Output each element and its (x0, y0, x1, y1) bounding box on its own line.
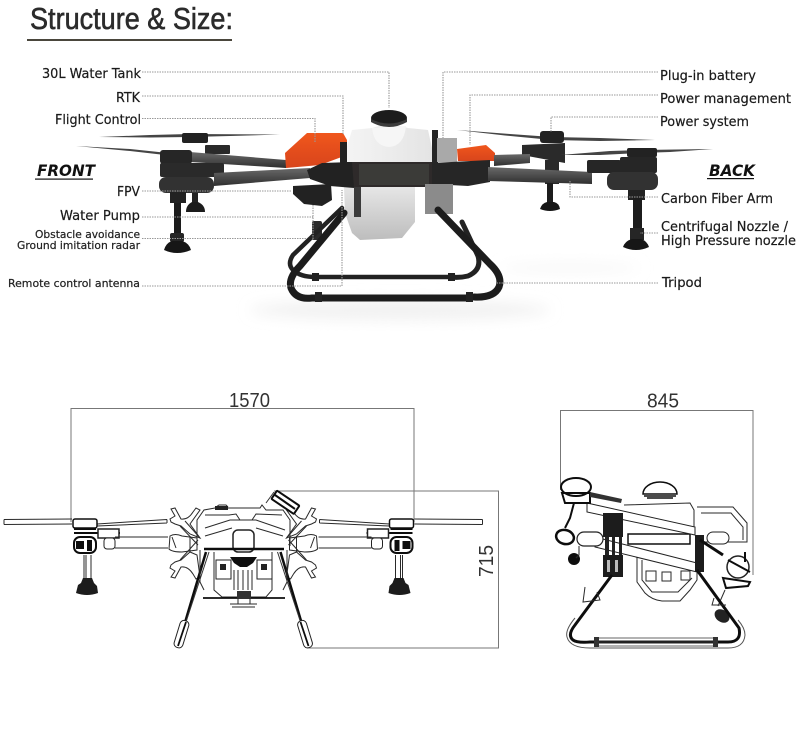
labels: front side: Ground imitation radar (17, 239, 140, 252)
upper arm (587, 503, 695, 535)
front motor (712, 552, 750, 626)
heading: BACK: BACK (709, 161, 757, 180)
lower arm (595, 537, 697, 572)
labels: front side: FPV (117, 185, 140, 200)
front right rotor (560, 148, 713, 250)
side view drawing (554, 390, 753, 648)
dimension: 845 (560, 390, 753, 575)
FPV camera (293, 184, 332, 206)
labels: back side: Power management (660, 92, 791, 107)
rear left rotor (99, 133, 280, 212)
front view drawing (4, 390, 498, 649)
dimension: 1570 (71, 390, 414, 522)
labels: back side: Power system (660, 115, 749, 130)
rear right rotor (457, 130, 655, 211)
tank (624, 482, 747, 601)
rear left arm (190, 152, 286, 168)
labels: back side: Tripod (661, 276, 702, 291)
left rotor and arm (4, 508, 209, 649)
labels: back side (660, 69, 796, 291)
labels: front side: Flight Control (55, 113, 141, 128)
rear right arm (494, 154, 530, 166)
left landing gear (290, 208, 470, 302)
front left rotor (76, 146, 224, 253)
dimension: 715: 715 (476, 545, 498, 577)
labels: front side: RTK (116, 91, 140, 106)
labels: back side: Plug-in battery (660, 69, 756, 84)
dimension: 1570: 1570 (229, 390, 270, 412)
centre tank (344, 110, 433, 240)
labels: front side: Obstacle avoidance (35, 228, 140, 241)
drone photo (76, 110, 713, 320)
centre hubs (307, 130, 490, 214)
labels: back side: Carbon Fiber Arm (661, 192, 773, 207)
labels: front side (8, 67, 141, 290)
dimension: 845: 845 (647, 390, 679, 412)
orange covers (285, 133, 495, 168)
leader lines (142, 72, 658, 286)
right rotor and arm (mirrored) (278, 508, 482, 649)
labels: front side: Remote control antenna (8, 277, 140, 290)
black frame posts (603, 513, 729, 577)
ground shadow (250, 263, 640, 320)
water pump (312, 221, 322, 240)
heading: FRONT: FRONT (37, 161, 96, 180)
labels: back side: Centrifugal Nozzle / (661, 220, 789, 235)
labels: back side: High Pressure nozzle (661, 234, 796, 249)
title: Structure & Size: (30, 1, 233, 36)
tripod (567, 570, 745, 648)
right landing gear (438, 210, 500, 302)
rear motor (554, 478, 622, 565)
dimension: 715 (274, 491, 498, 648)
tank outline (197, 491, 299, 607)
front right arm (488, 167, 592, 184)
front left arm (214, 168, 310, 186)
labels: front side: Water Pump (60, 209, 140, 224)
labels: front side: 30L Water Tank (42, 67, 141, 82)
